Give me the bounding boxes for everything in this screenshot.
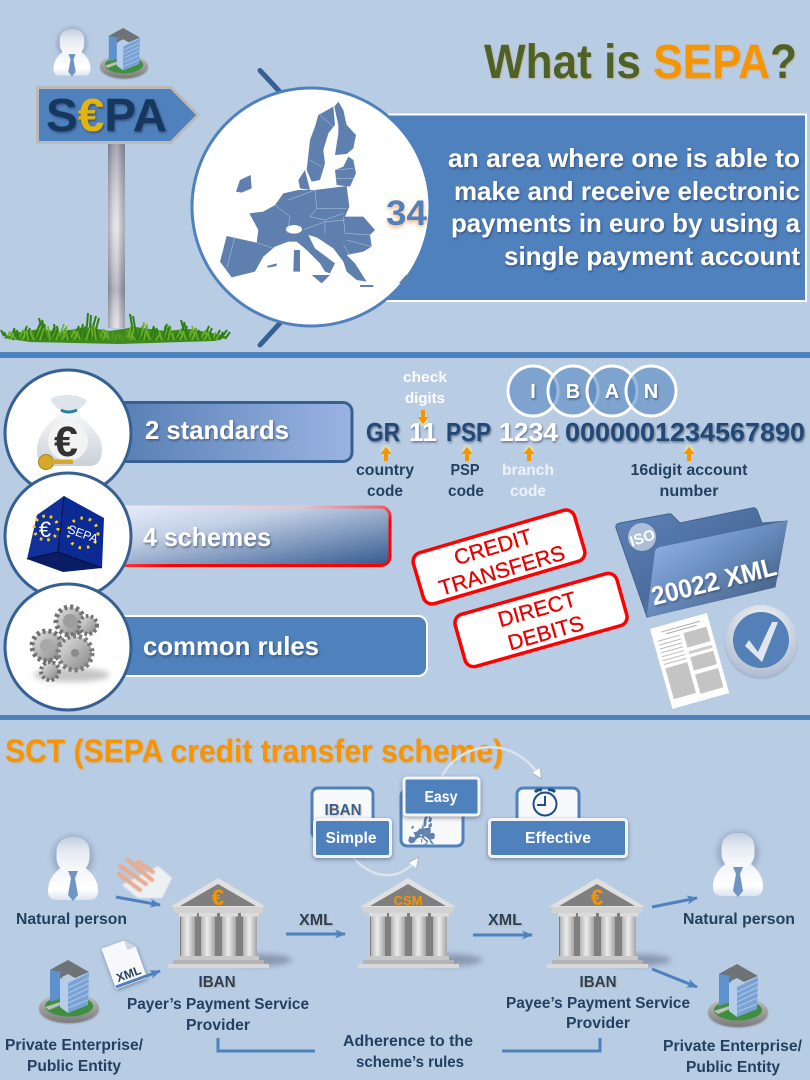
IBAN number: 1234: [499, 417, 559, 447]
bar: 4 schemes: 4 schemes: [143, 522, 271, 552]
IBAN number: GR: [366, 417, 400, 447]
connector left: [218, 1038, 315, 1051]
arrow: payee PSP to person: [652, 898, 697, 907]
IBAN number: 0000001234567890: [565, 417, 805, 447]
label: payer PSP: Payer’s Payment Service: [127, 996, 309, 1013]
red sticker: direct debits: DEBITS: [505, 611, 586, 655]
box: map behind Easy: [401, 790, 463, 846]
icon: CSM bank: CSM: [394, 893, 422, 908]
curved arrow: simple to easy via CSM: [353, 857, 418, 875]
red sticker: credit transfers: CREDIT: [451, 524, 535, 570]
label: adherence to rules: [343, 1033, 473, 1071]
definition text: payments in euro by using a: [451, 208, 801, 238]
label: private enterprise right: Private Enterprise/: [663, 1038, 803, 1055]
bar: 4 schemes: [100, 507, 390, 566]
box: Simple: [314, 820, 390, 856]
label: adherence to rules: Adherence to the: [343, 1033, 473, 1050]
IBAN number: [366, 417, 805, 447]
IBAN circles: N: [644, 381, 658, 403]
section divider top: [0, 352, 810, 358]
IBAN annotations: PSP: [450, 462, 480, 479]
icon: person right: [713, 831, 763, 897]
label: payer PSP: [127, 974, 309, 1034]
icon: SEPA cube: [27, 496, 104, 572]
icon: ISO 20022 XML folder: ISO: [628, 526, 658, 551]
IBAN circles: I: [530, 381, 536, 403]
icon: payer bank: [168, 878, 292, 968]
IBAN annotations: [356, 369, 748, 500]
box: IBAN: IBAN: [324, 802, 362, 819]
icon: ISO 20022 XML folder: 20022 XML: [648, 551, 780, 611]
arrow: payee PSP to enterprise: [652, 969, 697, 987]
arrow: XML to CSM: [286, 912, 345, 934]
arrow: person to payer PSP: [116, 897, 160, 905]
icon: hand on keyboard: [119, 860, 172, 898]
heading: SCT: SCT (SEPA credit transfer scheme): [5, 733, 503, 769]
label: natural person left: Natural person: [16, 911, 127, 928]
red sticker: credit transfers: TRANSFERS: [436, 541, 568, 601]
box: Simple: Simple: [326, 830, 377, 847]
number 34: 34: [386, 194, 428, 233]
label: private enterprise right: [663, 1038, 803, 1076]
circle: money bag: [5, 370, 131, 496]
box: Effective: [490, 820, 626, 856]
IBAN annotations: digits: [405, 390, 445, 407]
label: payer PSP: Provider: [186, 1017, 250, 1034]
red sticker: direct debits: DIRECT: [495, 587, 579, 632]
IBAN annotations: code: [448, 483, 484, 500]
icon: building above signpost: [100, 28, 148, 79]
map of Europe: [220, 102, 409, 287]
icon: payer bank: €: [212, 885, 224, 910]
label: natural person right: Natural person: [683, 911, 795, 928]
IBAN annotations: number: [660, 483, 718, 500]
label: payee PSP: [506, 974, 690, 1032]
label: payee PSP: Payee’s Payment Service: [506, 995, 690, 1012]
box: clock: [517, 788, 579, 838]
section divider middle: [0, 715, 810, 720]
definition text: [448, 143, 801, 271]
label: payee PSP: IBAN: [580, 974, 616, 991]
map circle tick upper: [260, 70, 281, 93]
red sticker: credit transfers: [411, 508, 587, 606]
map circle: [192, 88, 430, 326]
IBAN annotations: 16digit account: [630, 462, 748, 479]
grass: [1, 313, 230, 344]
icon: check badge: [725, 605, 797, 679]
arrow: XML to CSM: XML: [299, 912, 333, 929]
connector right: [502, 1038, 600, 1051]
IBAN annotations: country: [356, 462, 414, 479]
IBAN circles: B: [566, 381, 580, 403]
label: private enterprise right: Public Entity: [686, 1059, 780, 1076]
arrow: XML to payee PSP: XML: [488, 912, 522, 929]
IBAN number: PSP: [446, 417, 491, 447]
icon: XML document: XML: [114, 963, 143, 985]
icon: XML document: [101, 938, 147, 989]
circle: gears: [5, 584, 131, 710]
icon: building right: [708, 964, 768, 1028]
label: private enterprise left: [5, 1037, 144, 1075]
box: Easy: [404, 778, 479, 815]
icon: CSM bank: [358, 878, 482, 968]
icon: payee bank: [547, 878, 671, 968]
icon: person left: [48, 835, 98, 901]
signpost board: [38, 88, 198, 142]
bar: common rules: [100, 616, 427, 676]
arrow: XML to payee PSP: [473, 912, 532, 935]
icon: SEPA cube: SEPA: [66, 522, 100, 546]
SEPA logo text: S€PA: [46, 89, 167, 141]
map circle tick lower: [260, 322, 281, 345]
icon: money bag with key: €: [54, 418, 78, 466]
label: private enterprise left: Public Entity: [27, 1058, 121, 1075]
definition text: an area where one is able to: [448, 143, 800, 173]
label: payee PSP: Provider: [566, 1015, 630, 1032]
label: payer PSP: IBAN: [198, 974, 236, 991]
icon: person above signpost: [54, 28, 90, 76]
icon: SEPA cube: €: [39, 517, 51, 542]
box: IBAN: [312, 788, 373, 838]
box: Easy: Easy: [424, 789, 458, 806]
box: Effective: Effective: [525, 830, 591, 847]
definition text: make and receive electronic: [454, 176, 800, 206]
icon: document: [650, 613, 729, 709]
label: private enterprise left: Private Enterprise/: [5, 1037, 144, 1054]
definition text: single payment account: [504, 241, 800, 271]
bar: 2 standards: [100, 402, 352, 462]
icon: ISO 20022 XML folder: [616, 508, 787, 617]
curved arrow: easy to effective: [442, 747, 541, 778]
icon: alarm clock: [534, 790, 556, 816]
bar: 2 standards: 2 standards: [145, 415, 289, 445]
IBAN annotations: code: [510, 483, 546, 500]
icon: building left: [39, 960, 99, 1024]
IBAN annotations: branch: [502, 462, 554, 479]
IBAN annotations: check: [403, 369, 448, 386]
IBAN circles: [508, 366, 676, 416]
circle: SEPA cube: [5, 473, 131, 599]
IBAN number: 11: [409, 417, 437, 447]
title: What is SEPA?: [484, 36, 797, 89]
signpost pole: [108, 144, 125, 328]
panel: SEPA definition: [380, 114, 806, 301]
IBAN circles: A: [605, 381, 619, 403]
icon: payee bank: €: [591, 885, 603, 910]
label: adherence to rules: scheme’s rules: [356, 1054, 464, 1071]
bar: common rules: common rules: [143, 631, 319, 661]
IBAN annotations: code: [367, 483, 403, 500]
icon: gears: [32, 607, 110, 682]
red sticker: direct debits: [453, 571, 629, 669]
arrow: enterprise to payer PSP: [116, 971, 160, 987]
